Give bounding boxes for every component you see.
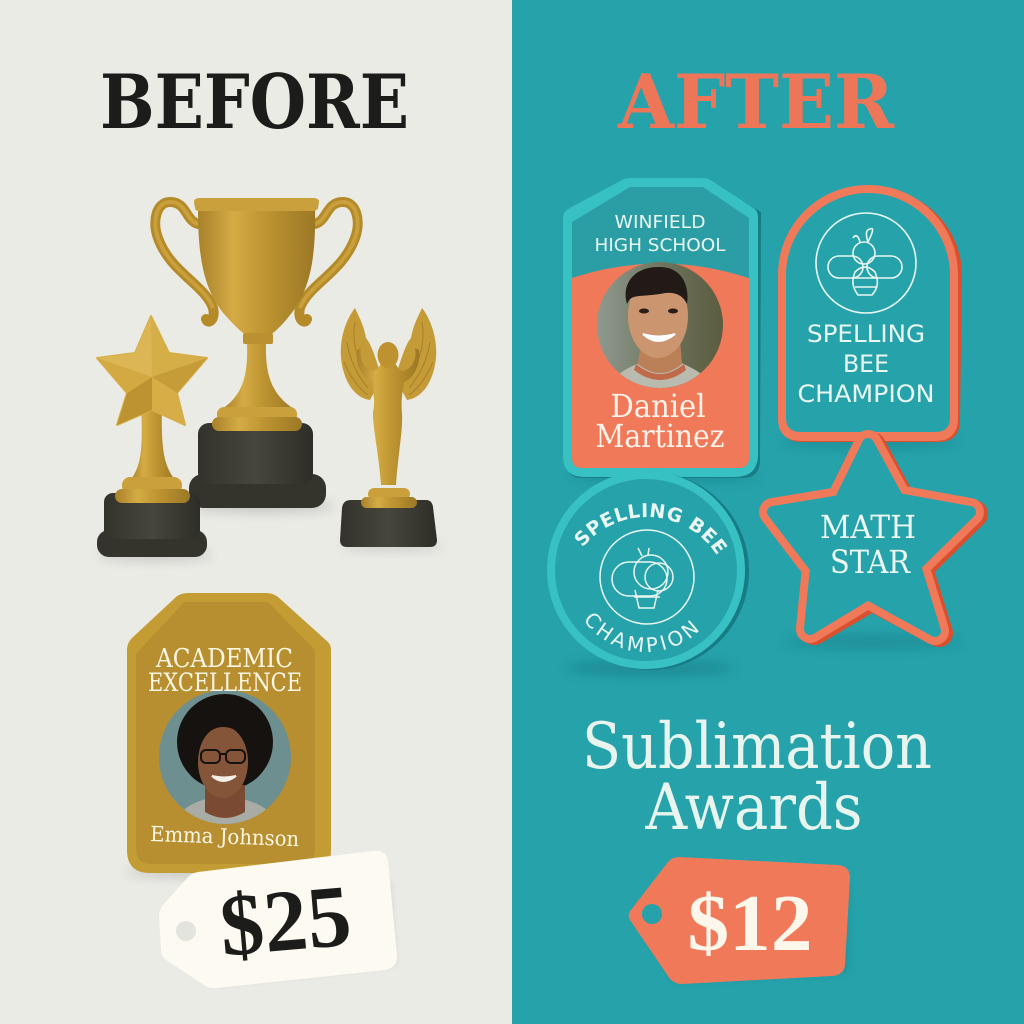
price tag: $25 bbox=[159, 851, 397, 988]
badge body bbox=[127, 593, 331, 873]
round frame bbox=[547, 471, 745, 669]
tag hole bbox=[176, 921, 196, 941]
text: BEE: BEE bbox=[843, 350, 889, 378]
name: Martinez: Martinez bbox=[596, 417, 724, 455]
illustration: trophy cup on black base bbox=[155, 198, 358, 512]
heading: HIGH SCHOOL: HIGH SCHOOL bbox=[594, 235, 726, 256]
text: SPELLING: SPELLING bbox=[807, 320, 925, 348]
illustration: winged figure trophy bbox=[340, 308, 444, 550]
price text: $25 bbox=[216, 868, 355, 976]
panel: before background bbox=[0, 0, 512, 1024]
heading: Sublimation Awards: Awards bbox=[645, 771, 862, 845]
heading: EXCELLENCE: EXCELLENCE bbox=[148, 668, 302, 697]
heading: ACADEMIC: ACADEMIC bbox=[155, 644, 293, 674]
price text: $12 bbox=[688, 880, 812, 968]
heading: WINFIELD: WINFIELD bbox=[614, 212, 706, 233]
price tag: $12 bbox=[629, 857, 850, 984]
heading: Sublimation Awards: Sublimation bbox=[582, 710, 932, 784]
icon: bee in circle bbox=[816, 213, 916, 313]
star frame bbox=[773, 444, 970, 631]
text: CHAMPION: CHAMPION bbox=[798, 380, 934, 408]
text: STAR: STAR bbox=[830, 543, 911, 581]
badge: academic excellence bbox=[125, 593, 331, 877]
badge: Winfield High School student ID bbox=[560, 178, 761, 481]
panel: after background bbox=[512, 0, 1024, 1024]
badge: math star bbox=[773, 444, 974, 648]
photo: Daniel bbox=[595, 260, 725, 392]
name: Emma Johnson: Emma Johnson bbox=[150, 822, 300, 851]
badge: spelling bee round bbox=[547, 474, 749, 678]
badge: spelling bee arch bbox=[778, 185, 962, 447]
photo: Emma bbox=[159, 690, 291, 824]
text: MATH: MATH bbox=[820, 508, 916, 546]
teal header bbox=[572, 187, 749, 468]
heading: Sublimation Awards bbox=[582, 710, 932, 845]
illustration: star trophy bbox=[97, 316, 213, 560]
outer frame bbox=[563, 178, 758, 477]
badge inner field bbox=[136, 602, 315, 864]
arc text: SPELLING BEE: SPELLING BEE bbox=[574, 503, 728, 554]
tag hole bbox=[642, 904, 662, 924]
heading: BEFORE: BEFORE bbox=[100, 58, 409, 146]
arch frame bbox=[778, 185, 958, 441]
name: Daniel: Daniel bbox=[610, 387, 706, 425]
coral panel bbox=[572, 264, 749, 468]
arc text: CHAMPION: CHAMPION bbox=[586, 614, 699, 652]
heading: AFTER: AFTER bbox=[617, 58, 895, 146]
icon: bee in circle bbox=[600, 530, 694, 624]
